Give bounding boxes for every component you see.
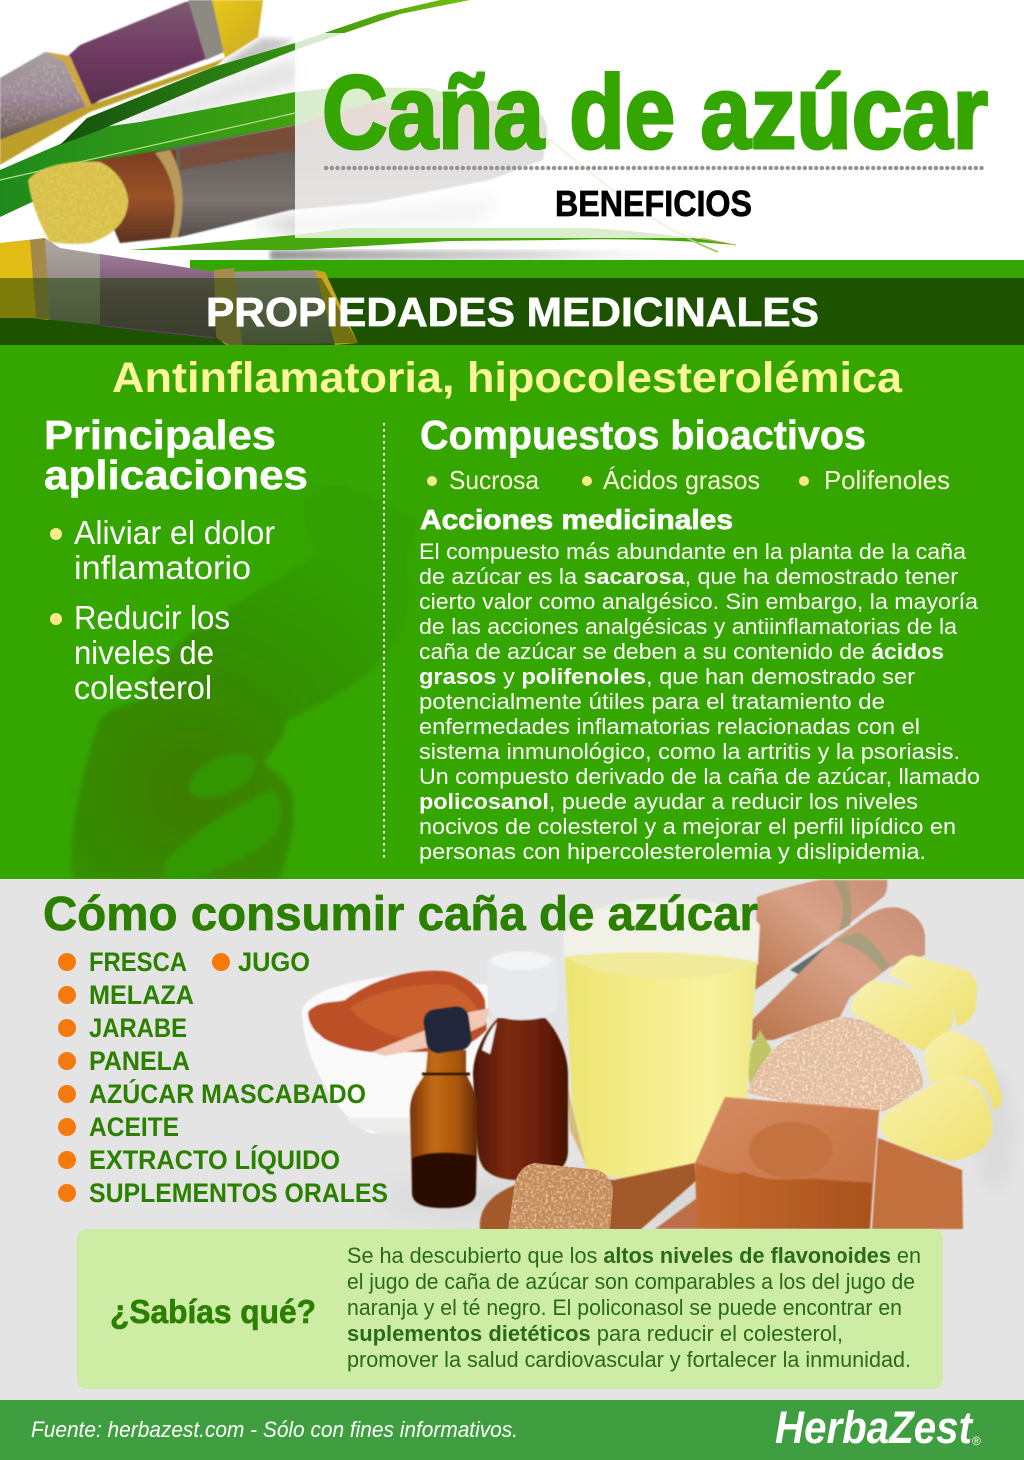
translucent white title panel bbox=[295, 33, 1024, 238]
title dotted rule bbox=[326, 166, 986, 170]
small bottle bbox=[410, 1005, 478, 1208]
logo: HerbaZest bbox=[775, 1402, 974, 1453]
product photo: sugar cane products bbox=[302, 880, 1013, 1230]
compounds list bbox=[427, 465, 950, 495]
sugar mound bbox=[747, 1017, 923, 1112]
compounds list: Ácidos grasos bbox=[603, 465, 760, 495]
sugar cane pieces bbox=[852, 955, 1002, 1161]
consumption list: JUGO bbox=[238, 947, 310, 977]
shadows on white bbox=[225, 38, 295, 75]
body text: El compuesto más abundante en la planta de la caña bbox=[419, 539, 966, 564]
green background bbox=[0, 345, 1024, 879]
application list bbox=[50, 514, 275, 706]
application list: niveles de bbox=[74, 634, 214, 671]
sugar canes bbox=[745, 880, 925, 1085]
footer bbox=[0, 1400, 1024, 1460]
header photo: sugar cane stalks and leaves bbox=[0, 0, 1024, 345]
panel: main applications bbox=[44, 412, 308, 706]
callout text: suplementos dietéticos para reducir el colesterol, bbox=[347, 1321, 843, 1346]
body text: policosanol, puede ayudar a reducir los niveles bbox=[419, 789, 918, 814]
compounds list: Sucrosa bbox=[449, 465, 539, 495]
body text bbox=[419, 539, 980, 864]
body text: potencialmente útiles para el tratamiento de bbox=[419, 689, 885, 714]
subheading: Acciones medicinales bbox=[420, 504, 733, 535]
panela blocks bbox=[655, 1097, 963, 1229]
body text: enfermedades inflamatorias relacionadas con el bbox=[419, 714, 920, 739]
consumption list bbox=[58, 947, 388, 1208]
panel: how to consume bbox=[0, 879, 1024, 1400]
application list: Reducir los bbox=[74, 599, 230, 636]
properties line: Antinflamatoria, hipocolesterolémica bbox=[112, 354, 903, 402]
stalk: bottom bbox=[0, 238, 360, 345]
body text: de azúcar es la sacarosa, que ha demostrado tener bbox=[419, 564, 959, 589]
stalk: top bbox=[0, 0, 263, 165]
consumption list: SUPLEMENTOS ORALES bbox=[89, 1178, 388, 1208]
section heading: Cómo consumir caña de azúcar bbox=[43, 888, 758, 941]
juice glass bbox=[563, 898, 760, 1178]
consumption list: AZÚCAR MASCABADO bbox=[89, 1078, 366, 1109]
leaf: thin upper bbox=[60, 0, 470, 145]
heading: Compuestos bioactivos bbox=[420, 412, 866, 458]
consumption list: MELAZA bbox=[89, 980, 194, 1010]
dark band overlay on stalk bbox=[0, 278, 360, 345]
callout text: Se ha descubierto que los altos niveles de flavonoides en bbox=[347, 1243, 921, 1268]
stalk: middle, continuing under the title panel bbox=[28, 100, 547, 244]
body text: personas con hipercolesterolemia y dislipidemia. bbox=[419, 839, 926, 864]
callout text: promover la salud cardiovascular y fortalecer la inmunidad. bbox=[347, 1347, 911, 1372]
application list: inflamatorio bbox=[74, 549, 251, 586]
consumption list: FRESCA bbox=[89, 947, 187, 977]
callout: did you know bbox=[77, 1229, 943, 1389]
green strip bbox=[190, 260, 1024, 278]
bowl of jam bbox=[302, 971, 490, 1133]
section heading: PROPIEDADES MEDICINALES bbox=[206, 289, 819, 335]
consumption list: EXTRACTO LÍQUIDO bbox=[89, 1144, 340, 1175]
big bottle bbox=[473, 951, 568, 1180]
consumption list: ACEITE bbox=[89, 1112, 179, 1142]
callout heading: ¿Sabías qué? bbox=[110, 1293, 316, 1330]
application list: colesterol bbox=[74, 669, 212, 706]
callout text: el jugo de caña de azúcar son comparables a los del jugo de bbox=[347, 1269, 915, 1294]
consumption list: JARABE bbox=[89, 1013, 187, 1043]
logo: ® bbox=[972, 1434, 981, 1448]
body text: Un compuesto derivado de la caña de azúcar, llamado bbox=[419, 764, 980, 789]
heading: aplicaciones bbox=[44, 452, 308, 498]
callout text: naranja y el té negro. El policonasol se puede encontrar en bbox=[347, 1295, 902, 1320]
raw sugar cube bbox=[508, 1163, 613, 1230]
heading: Principales bbox=[44, 412, 276, 458]
body text: cierto valor como analgésico. Sin embargo, la mayoría bbox=[419, 589, 978, 614]
body text: grasos y polifenoles , que han demostrado ser bbox=[419, 664, 916, 689]
leaf: lower bbox=[130, 228, 735, 250]
icon: hand silhouette bbox=[72, 485, 417, 879]
body text: nocivos de colesterol y a mejorar el perfil lipídico en bbox=[419, 814, 956, 839]
spoon bbox=[480, 1163, 697, 1230]
application list: Aliviar el dolor bbox=[74, 514, 275, 551]
body text: sistema inmunológico, como la artritis y la psoriasis. bbox=[419, 739, 960, 764]
consumption list: PANELA bbox=[89, 1046, 190, 1076]
dark band behind stalk bbox=[0, 278, 1024, 345]
leaf: large bbox=[0, 87, 550, 217]
panel: bioactive compounds bbox=[419, 412, 980, 864]
body text: de las acciones analgésicas y antiinflamatorias de la bbox=[419, 614, 957, 639]
callout text bbox=[347, 1243, 921, 1372]
subtitle: BENEFICIOS bbox=[555, 183, 752, 224]
body text: caña de azúcar se deben a su contenido de ácidos bbox=[419, 639, 944, 664]
source note: Fuente: herbazest.com - Sólo con fines informativos. bbox=[31, 1417, 518, 1442]
panel: medicinal properties bbox=[0, 289, 1024, 879]
heading bbox=[44, 412, 308, 498]
dry leaf tips bbox=[550, 140, 718, 252]
compounds list: Polifenoles bbox=[824, 465, 950, 495]
